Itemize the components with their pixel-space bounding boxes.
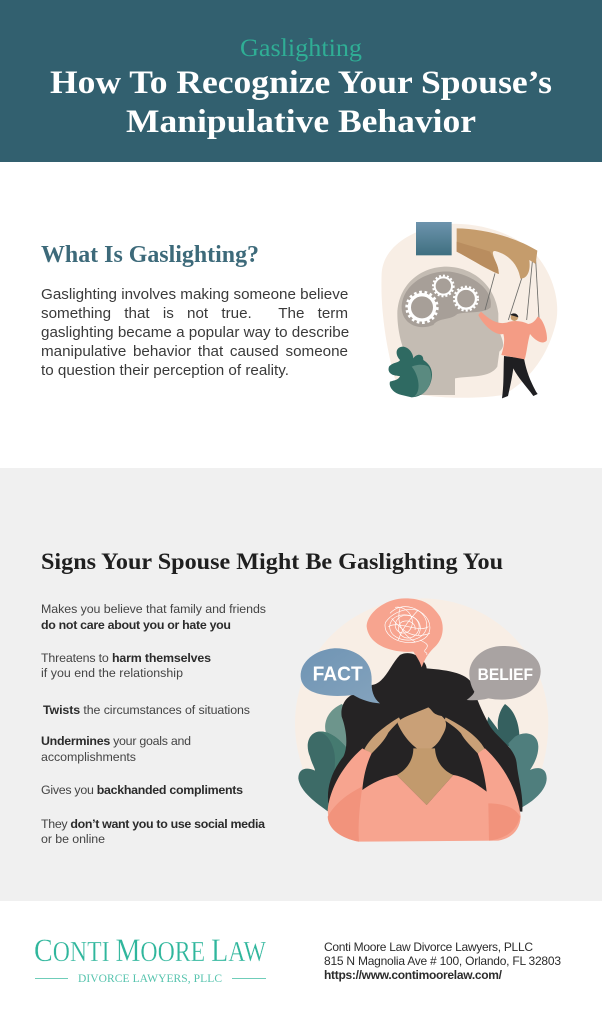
panel: header bbox=[0, 0, 602, 162]
list of signs: They don’t want you to use social media bbox=[41, 817, 265, 831]
paragraph: definition bbox=[41, 285, 361, 385]
heading: Signs Your Spouse Might Be Gaslighting You: Signs Your Spouse Might Be Gaslighting You bbox=[41, 549, 503, 575]
illustration: woman with tangled thoughts between fact and belief bbox=[295, 598, 548, 842]
paragraph: definition: something that is not true. The term bbox=[41, 305, 348, 322]
title: How To Recognize Your Spouse’s bbox=[50, 65, 552, 101]
illustration: woman with tangled thoughts between fact and belief: FACT bbox=[313, 664, 363, 686]
paragraph: definition: Gaslighting involves making someone believe bbox=[41, 286, 348, 303]
contact details: 815 N Magnolia Ave # 100, Orlando, FL 32803 bbox=[324, 954, 561, 968]
heading: What Is Gaslighting?: What Is Gaslighting? bbox=[41, 242, 259, 268]
logo: Conti Moore Law Divorce Lawyers: CONTI MOORE LAW bbox=[34, 933, 266, 969]
list of signs: Undermines your goals and bbox=[41, 734, 191, 748]
contact details: https://www.contimoorelaw.com/ bbox=[324, 968, 503, 982]
list of signs: accomplishments bbox=[41, 750, 136, 764]
list of signs: Gives you backhanded compliments bbox=[41, 783, 243, 797]
contact details: Conti Moore Law Divorce Lawyers, PLLC bbox=[324, 940, 533, 954]
list of signs bbox=[41, 602, 266, 846]
list of signs: Makes you believe that family and friends bbox=[41, 602, 266, 616]
paragraph: definition: to question their perception of reality. bbox=[41, 362, 289, 379]
contact details bbox=[324, 940, 561, 982]
logo: Conti Moore Law Divorce Lawyers bbox=[34, 933, 266, 985]
panel: what is gaslighting bbox=[0, 162, 602, 468]
title: Manipulative Behavior bbox=[126, 104, 476, 140]
panel: signs of gaslighting bbox=[0, 468, 602, 901]
paragraph: definition: manipulative behavior that caused someone bbox=[41, 343, 348, 360]
list of signs: do not care about you or hate you bbox=[41, 618, 231, 632]
logo: Conti Moore Law Divorce Lawyers: DIVORCE LAWYERS, PLLC bbox=[78, 973, 222, 985]
list of signs: Threatens to harm themselves bbox=[41, 651, 211, 665]
illustration: puppet hand controlling a person over a head with gears bbox=[381, 222, 557, 398]
title bbox=[50, 65, 552, 140]
illustration: woman with tangled thoughts between fact and belief: BELIEF bbox=[478, 665, 533, 684]
eyebrow: Gaslighting: Gaslighting bbox=[240, 35, 363, 62]
list of signs: if you end the relationship bbox=[41, 666, 183, 680]
list of signs: or be online bbox=[41, 832, 105, 846]
list of signs: Twists the circumstances of situations bbox=[43, 703, 250, 717]
paragraph: definition: gaslighting became a popular way to describe bbox=[41, 324, 349, 341]
panel: footer bbox=[0, 901, 602, 1024]
